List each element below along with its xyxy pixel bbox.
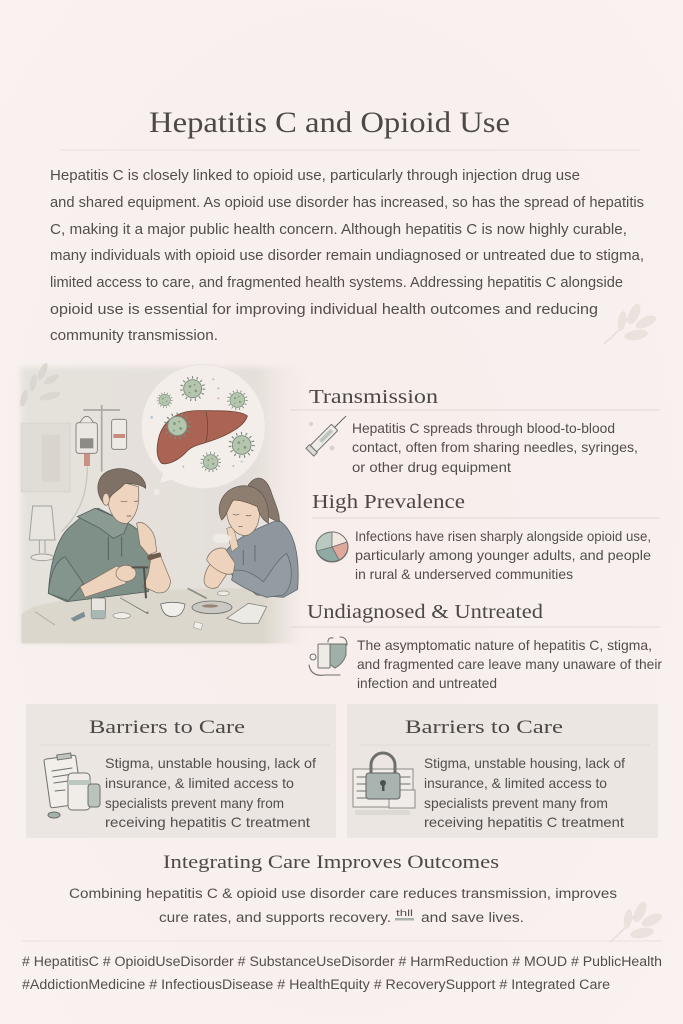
icon: vial and shield bbox=[309, 637, 347, 675]
text: barriers right: Stigma, unstable housing, lack of bbox=[424, 756, 625, 771]
text: transmission bbox=[352, 421, 638, 475]
panel: barriers to care left bbox=[26, 704, 336, 838]
text: high prevalence: particularly among younger adults, and people bbox=[355, 548, 651, 563]
text: integrating care: Combining hepatitis C & opioid use disorder care reduces transmission, improves bbox=[69, 886, 617, 902]
decorative leaf sprig bottom bbox=[610, 900, 664, 942]
text: barriers right: receiving hepatitis C treatment bbox=[424, 815, 624, 830]
intro paragraph: limited access to care, and fragmented health systems. Addressing hepatitis C alongside bbox=[50, 275, 623, 291]
text: high prevalence: in rural & underserved communities bbox=[355, 567, 573, 582]
text: undiagnosed and untreated: infection and untreated bbox=[357, 676, 497, 691]
illustration: two people at a table with liver thought bubble bbox=[19, 362, 314, 643]
intro paragraph: Hepatitis C is closely linked to opioid use, particularly through injection drug use bbox=[50, 168, 580, 184]
hashtags bbox=[22, 954, 662, 992]
heading: barriers right: Barriers to Care bbox=[405, 717, 563, 738]
heading: undiagnosed and untreated: Undiagnosed & Untreated bbox=[307, 601, 543, 623]
text: barriers right: insurance, & limited access to bbox=[424, 776, 607, 791]
icon: padlock on documents bbox=[353, 753, 415, 815]
sprig bbox=[19, 362, 61, 408]
panel: barriers to care right bbox=[347, 704, 658, 838]
text: undiagnosed and untreated: The asymptomatic nature of hepatitis C, stigma, bbox=[357, 638, 652, 653]
table bbox=[22, 588, 302, 643]
text: barriers left: insurance, & limited access to bbox=[105, 776, 294, 791]
icon: pie chart bbox=[316, 532, 348, 562]
text: transmission: contact, often from sharing needles, syringes, bbox=[352, 440, 638, 455]
intro paragraph bbox=[50, 168, 644, 344]
section: undiagnosed and untreated bbox=[290, 601, 662, 691]
text: integrating care: thll bbox=[396, 908, 413, 918]
intro paragraph: community transmission. bbox=[50, 328, 218, 344]
text: integrating care: and save lives. bbox=[421, 910, 524, 926]
heading: integrating care: Integrating Care Improves Outcomes bbox=[163, 852, 499, 873]
lamp bbox=[29, 506, 55, 561]
illustration background bbox=[21, 367, 314, 643]
heading: transmission: Transmission bbox=[309, 386, 438, 408]
heading: high prevalence: High Prevalence bbox=[312, 491, 465, 513]
liver bbox=[157, 411, 247, 464]
heading: barriers left: Barriers to Care bbox=[89, 717, 245, 738]
text: undiagnosed and untreated: and fragmented care leave many unaware of their bbox=[357, 657, 662, 672]
intro paragraph: and shared equipment. As opioid use disorder has increased, so has the spread of hepatitis bbox=[50, 195, 644, 211]
icon: syringe bbox=[306, 412, 350, 456]
title: Hepatitis C and Opioid Use bbox=[149, 106, 510, 139]
intro paragraph: C, making it a major public health concern. Although hepatitis C is now highly curable, bbox=[50, 222, 627, 238]
section: high prevalence bbox=[312, 491, 660, 582]
text: transmission: Hepatitis C spreads through blood-to-blood bbox=[352, 421, 615, 436]
IV stand and bags bbox=[62, 405, 127, 532]
text: barriers left: Stigma, unstable housing, lack of bbox=[105, 756, 316, 771]
text: barriers left bbox=[105, 756, 316, 830]
text: barriers right bbox=[424, 756, 625, 830]
text: integrating care: cure rates, and supports recovery. bbox=[159, 910, 391, 926]
intro paragraph: opioid use is essential for improving individual health outcomes and reducing bbox=[50, 302, 598, 318]
decorative leaf sprig top bbox=[604, 302, 658, 344]
text: high prevalence: Infections have risen sharply alongside opioid use, bbox=[355, 529, 651, 544]
man bbox=[48, 469, 171, 602]
text: undiagnosed and untreated bbox=[357, 638, 662, 691]
section: transmission bbox=[290, 386, 660, 475]
thought bubble bbox=[141, 365, 265, 495]
woman bbox=[204, 478, 298, 597]
hashtags: # HepatitisC # OpioidUseDisorder # SubstanceUseDisorder # HarmReduction # MOUD # PublicHealth bbox=[22, 954, 662, 969]
text: barriers left: specialists prevent many from bbox=[105, 796, 284, 811]
text: barriers right: specialists prevent many from bbox=[424, 796, 608, 811]
hashtags: #AddictionMedicine # InfectiousDisease # HealthEquity # RecoverySupport # Integrated Care bbox=[22, 977, 610, 992]
intro paragraph: many individuals with opioid use disorder remain undiagnosed or untreated due to stigma, bbox=[50, 248, 644, 264]
text: barriers left: receiving hepatitis C treatment bbox=[105, 815, 310, 830]
text: high prevalence bbox=[355, 529, 651, 582]
icon: clipboard and bottles bbox=[44, 753, 100, 818]
text: transmission: or other drug equipment bbox=[352, 460, 511, 475]
table items bbox=[35, 588, 267, 630]
text: integrating care bbox=[69, 886, 617, 926]
